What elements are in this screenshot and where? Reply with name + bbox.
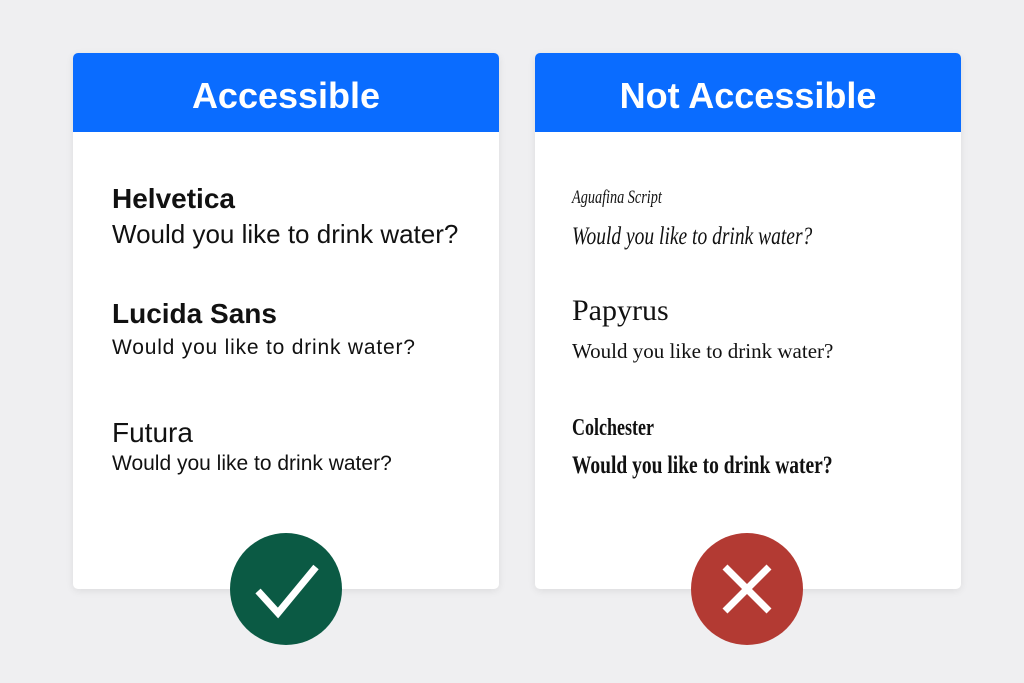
heading: Not Accessible: [535, 53, 961, 132]
text: Futura name: Futura: [112, 417, 193, 448]
text: Lucida Sans name: Lucida Sans: [112, 298, 277, 329]
icon: check circle: [230, 533, 342, 645]
panel: not accessible: [535, 53, 961, 589]
panel: accessible: [73, 53, 499, 589]
icon: x circle: [691, 533, 803, 645]
text: Colchester name: Colchester: [572, 415, 654, 441]
text: Papyrus name: Papyrus: [572, 294, 669, 327]
heading: Accessible: [73, 53, 499, 132]
text: Papyrus sample: Would you like to drink water?: [572, 339, 833, 363]
text: Lucida sample: Would you like to drink water?: [112, 336, 416, 359]
text: Helvetica name: Helvetica: [112, 183, 235, 214]
heading: Not Accessible: Not Accessible: [620, 75, 876, 116]
text: Colchester sample: Would you like to drink water?: [572, 452, 833, 479]
heading: Accessible: Accessible: [192, 75, 380, 116]
text: Aguafina name: Aguafina Script: [572, 187, 662, 208]
text: Futura sample: Would you like to drink water?: [112, 452, 392, 475]
text: Helvetica sample: Would you like to drink water?: [112, 219, 458, 249]
text: Aguafina sample: Would you like to drink water?: [572, 223, 812, 250]
